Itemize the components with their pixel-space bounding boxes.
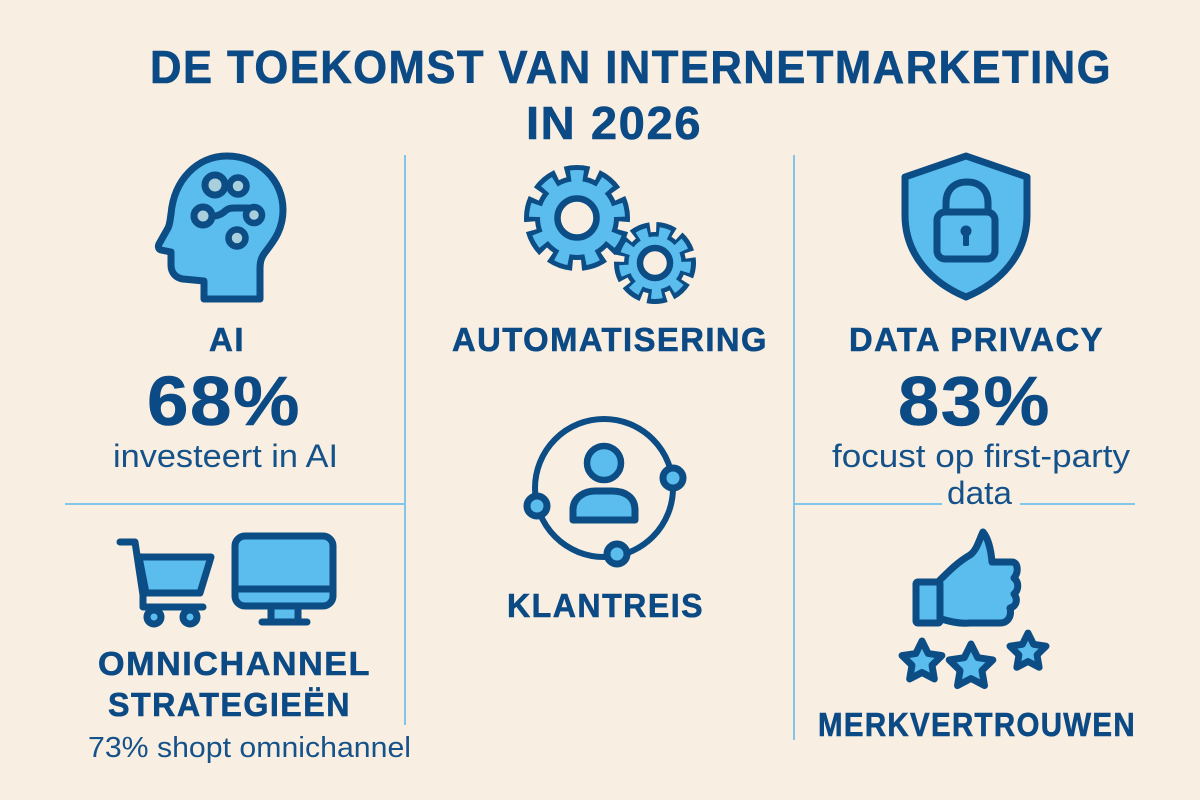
icon: shopping cart bbox=[120, 542, 211, 624]
icon: shield with padlock bbox=[905, 156, 1027, 297]
caption: first-party data: data bbox=[947, 475, 1012, 511]
stat: 68%: 68% bbox=[147, 362, 301, 440]
heading: data privacy: DATA PRIVACY bbox=[849, 321, 1104, 358]
icon: customer journey circle bbox=[527, 419, 683, 564]
heading: omnichannel strategieën: OMNICHANNEL bbox=[98, 645, 371, 682]
icon: head with circuit bbox=[158, 156, 283, 299]
caption: 73% shopt omnichannel: 73% shopt omnichannel bbox=[88, 732, 411, 764]
title bbox=[150, 41, 1112, 149]
icon: three stars bbox=[902, 633, 1046, 686]
title: DE TOEKOMST VAN INTERNETMARKETING bbox=[150, 41, 1112, 93]
heading: merkvertrouwen: MERKVERTROUWEN bbox=[818, 706, 1136, 743]
panel: klantreis bbox=[507, 419, 704, 624]
icon: gears bbox=[522, 163, 690, 298]
caption: first-party data bbox=[832, 438, 1130, 511]
heading: automatisering: AUTOMATISERING bbox=[452, 321, 768, 358]
panel: automatisering bbox=[452, 163, 768, 358]
panel: merkvertrouwen bbox=[818, 532, 1136, 743]
stat: 83%: 83% bbox=[898, 362, 1051, 440]
panel: AI bbox=[113, 156, 338, 474]
panel: omnichannel bbox=[88, 536, 411, 764]
heading: AI: AI bbox=[209, 321, 245, 358]
heading: omnichannel strategieën: STRATEGIEËN bbox=[108, 686, 351, 723]
caption: investeert in AI: investeert in AI bbox=[113, 438, 338, 474]
heading: klantreis: KLANTREIS bbox=[507, 587, 704, 624]
title: IN 2026 bbox=[526, 97, 702, 149]
panel: data privacy bbox=[832, 156, 1130, 511]
icon: desktop monitor bbox=[235, 536, 333, 622]
heading: omnichannel strategieën bbox=[98, 645, 371, 723]
icon: thumbs up bbox=[916, 532, 1018, 623]
caption: first-party data: focust op first-party bbox=[832, 438, 1130, 474]
